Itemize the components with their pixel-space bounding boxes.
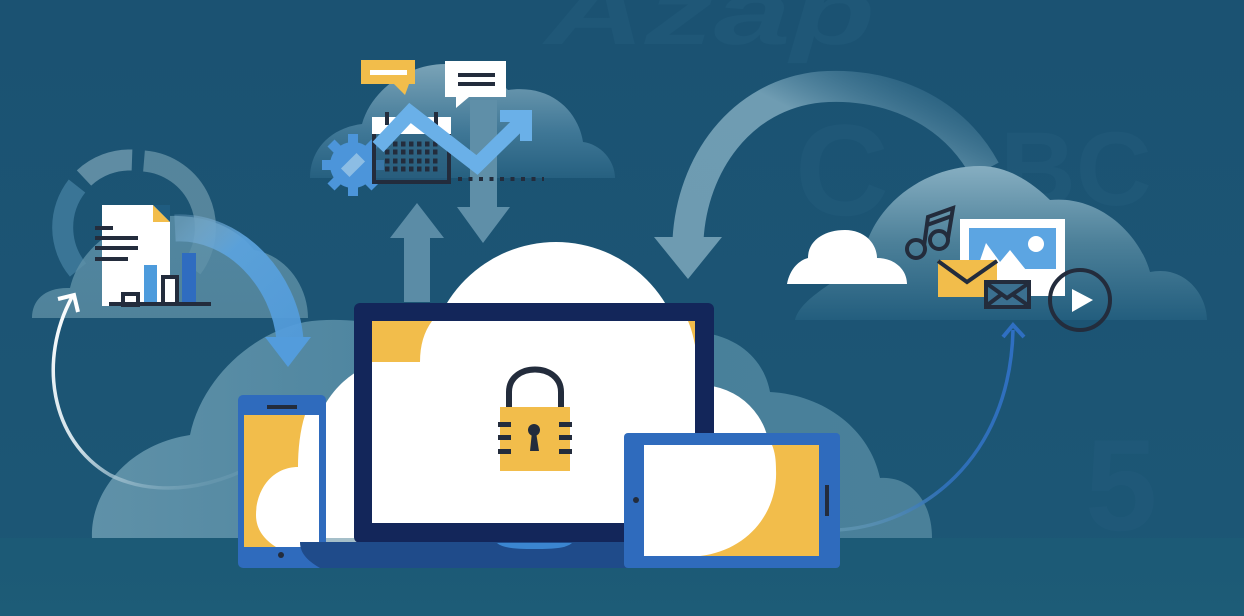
- icon: music notes: [907, 208, 953, 258]
- icon: calendar: [372, 112, 451, 182]
- panel: white cloud: [313, 242, 770, 542]
- icon: picture frame: [960, 219, 1065, 296]
- panel: top cloud: [310, 64, 615, 178]
- icon: play button: [1050, 270, 1110, 330]
- icon: document with bars: [95, 205, 211, 306]
- arrow: thin white curved: [53, 295, 300, 488]
- arrow: zigzag: [378, 110, 532, 165]
- dotted line: [458, 177, 544, 181]
- panel: left cloud: [32, 216, 308, 318]
- ring chart: [63, 160, 205, 270]
- bottom ground band: [0, 538, 1244, 616]
- icon: padlock: [498, 370, 572, 471]
- large curved arrow to laptop: [654, 86, 985, 279]
- icon: gear: [322, 134, 384, 196]
- phone: [238, 395, 326, 568]
- icon: small envelope: [986, 282, 1029, 307]
- callout: yellow bubble: [361, 60, 415, 95]
- laptop base: [300, 542, 640, 568]
- icon: small white cloud: [787, 230, 907, 284]
- arrow: down: [457, 100, 510, 243]
- tablet: [624, 433, 840, 568]
- arrow: up: [390, 203, 444, 302]
- panel: right cloud: [795, 166, 1207, 320]
- panel: back cloud: [92, 320, 932, 538]
- icon: yellow envelope: [938, 260, 997, 297]
- faint background letters: C: [795, 97, 889, 243]
- laptop display: [354, 303, 714, 543]
- faint background letters: BC: [1000, 111, 1152, 228]
- arrow: blue curved: [175, 228, 311, 367]
- faint background letters: [542, 0, 1157, 558]
- faint background letters: 5: [1085, 412, 1157, 558]
- arrow: right thin curved: [838, 325, 1024, 530]
- callout: white bubble: [445, 61, 506, 108]
